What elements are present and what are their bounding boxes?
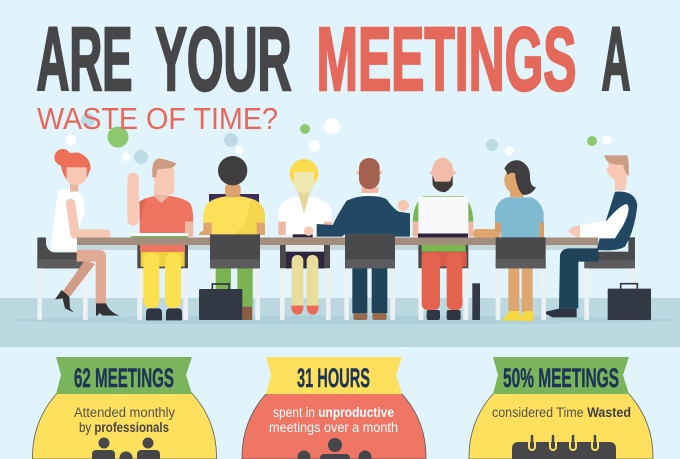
title xyxy=(36,10,630,110)
person: woman in teal top seen from behind xyxy=(473,160,546,321)
title: ARE xyxy=(36,10,132,110)
person: man in navy suit seen from behind xyxy=(304,158,410,320)
person: woman in white dress xyxy=(37,149,119,320)
banner text: 62 MEETINGS xyxy=(74,363,174,393)
body text: Attended monthly xyxy=(74,405,175,420)
table top xyxy=(77,238,598,245)
laptop base on table xyxy=(418,234,468,238)
infographic canvas: A xyxy=(602,10,630,110)
arm and hand of man in vest xyxy=(568,226,580,237)
thought bubbles xyxy=(66,113,612,164)
body text: considered Time Wasted xyxy=(492,405,631,420)
open notebook on table xyxy=(131,233,188,238)
briefcase right xyxy=(608,284,651,320)
subtitle: WASTE OF TIME? xyxy=(37,101,278,136)
person: man in yellow shirt seen from behind xyxy=(198,156,265,320)
person: blonde woman facing viewer xyxy=(278,159,332,320)
panel: 62 meetings xyxy=(32,357,217,459)
person: man with raised hand xyxy=(133,158,193,320)
icon: three people xyxy=(92,438,160,459)
banner: 31 hours xyxy=(266,357,402,394)
icon: group of people xyxy=(298,438,372,459)
person: man in vest in profile xyxy=(546,155,637,320)
body text line two: meetings over a month xyxy=(269,420,398,435)
floor xyxy=(0,298,680,347)
person: bald bearded man with laptop xyxy=(413,158,473,320)
waste bin post xyxy=(472,283,480,320)
body text: spent in unproductive xyxy=(273,405,394,420)
table shadow xyxy=(77,244,598,250)
panel: 31 hours xyxy=(242,357,426,459)
briefcase left xyxy=(199,284,242,320)
banner: 50% meetings xyxy=(493,357,629,394)
panel: 50% meetings xyxy=(469,357,653,459)
title: YOUR xyxy=(156,10,292,110)
body text line two: by professionals xyxy=(79,420,169,435)
icon: calendar xyxy=(512,436,616,459)
banner: 62 meetings xyxy=(56,357,192,394)
banner text: 31 HOURS xyxy=(297,363,370,393)
